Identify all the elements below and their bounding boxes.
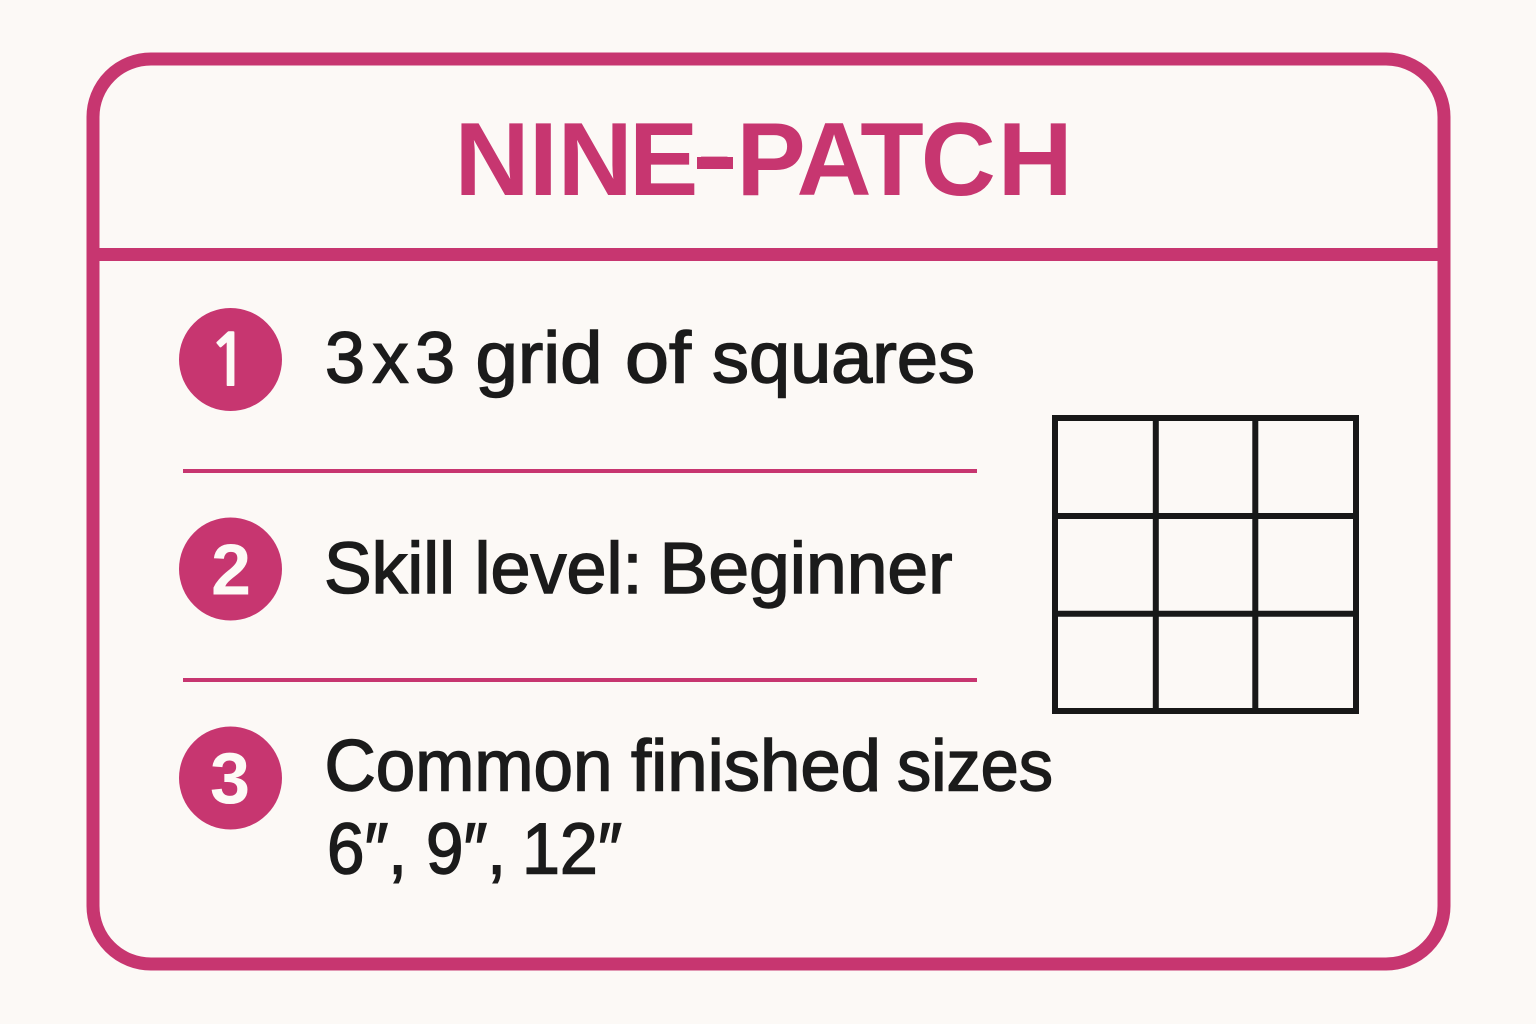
item 1 text: 3 — [325, 318, 365, 398]
number badge 1 — [179, 308, 282, 411]
title — [454, 97, 1073, 218]
number badge 2: 2 — [211, 530, 251, 610]
item 1 text: x — [372, 318, 408, 398]
item 2 text: level: — [474, 529, 642, 609]
card: outer frame — [93, 59, 1444, 964]
item 3 text: 12″ — [522, 810, 622, 890]
item 3 text: 9″, — [426, 810, 506, 890]
number badge 2 — [179, 518, 282, 620]
item 3 — [179, 726, 1053, 890]
item 1 — [179, 308, 975, 411]
header divider — [93, 248, 1444, 261]
item 3 text: 6″, — [327, 810, 407, 890]
title: PATCH — [736, 102, 1073, 218]
divider 2 — [183, 678, 977, 682]
item 1 text: squares — [712, 318, 975, 398]
item 2 text: Beginner — [660, 529, 952, 609]
title: NINE — [454, 102, 698, 218]
item 1 text: grid — [476, 318, 602, 398]
item 3 text: Common — [324, 726, 612, 806]
divider 1 — [183, 469, 977, 473]
item 2 — [179, 518, 952, 620]
item 2 text: Skill — [324, 529, 455, 609]
item 1 text: 3 — [415, 318, 455, 398]
number badge 3: 3 — [210, 739, 250, 819]
title: - — [697, 97, 732, 213]
item 3 text: finished — [631, 726, 881, 806]
number badge 1: 1 — [207, 325, 251, 397]
nine-patch grid diagram — [1055, 418, 1356, 711]
number badge 3 — [179, 726, 282, 830]
item 3 text — [324, 726, 1053, 890]
item 3 text: sizes — [897, 726, 1053, 806]
item 1 text: of — [625, 318, 692, 398]
